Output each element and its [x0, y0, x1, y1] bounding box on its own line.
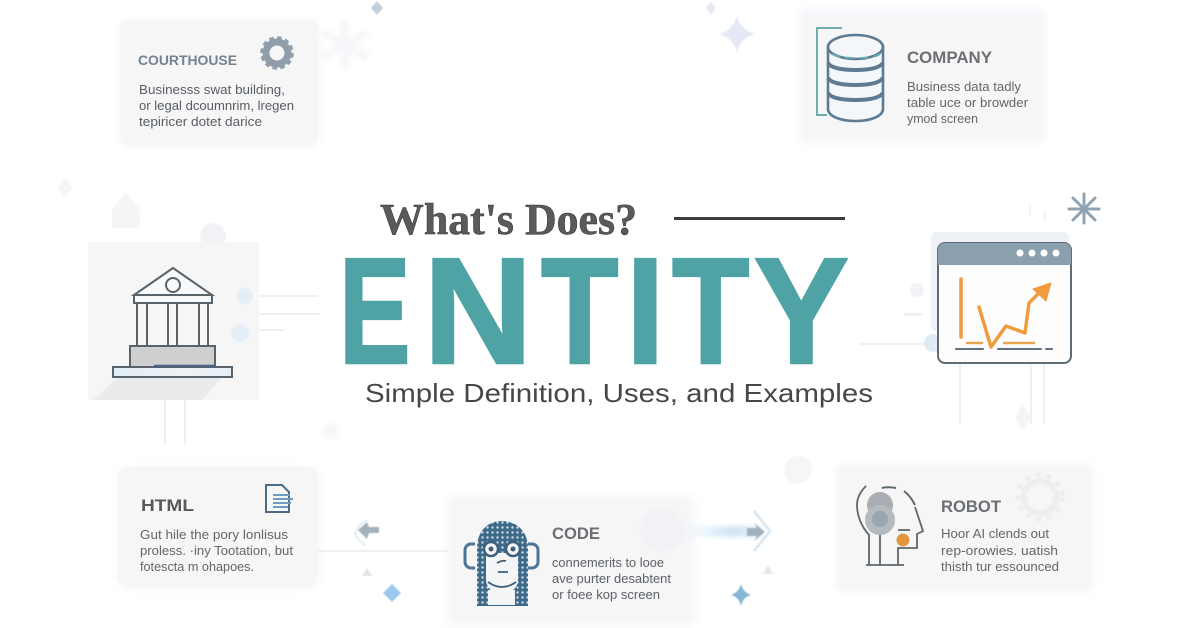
icon: small sparkles right [731, 564, 773, 606]
panel: company [800, 10, 1044, 142]
heading: code: CODE [552, 525, 600, 543]
gear watermark [1018, 475, 1062, 519]
icon: database [817, 28, 883, 121]
title: ENTITY: T [540, 226, 618, 395]
title: ENTITY: T [672, 226, 749, 395]
text: company description [907, 79, 1029, 126]
window dots [1016, 250, 1060, 256]
icon: face [465, 521, 538, 606]
heading: courthouse: COURTHOUSE [138, 53, 237, 68]
panel: html [118, 467, 317, 587]
text: html description: proless. ·iny Tootation, but [140, 543, 293, 558]
heading: robot: ROBOT [941, 498, 1001, 516]
panel: robot [838, 466, 1092, 590]
text: html description: Gut hile the pory lonlisus [140, 527, 289, 542]
arrow: left [355, 520, 379, 545]
text: courthouse description: Businesss swat building, [139, 82, 285, 97]
panel: courthouse [121, 20, 317, 144]
line chart [956, 279, 1052, 349]
title: ENTITY: E [338, 226, 410, 395]
title: ENTITY [338, 226, 848, 395]
chart window [924, 232, 1071, 363]
title: ENTITY: Y [754, 226, 848, 395]
title: What's Does?: What's Does? [380, 195, 637, 244]
text: robot description: rep-orowies. uatish [941, 543, 1058, 558]
text: html description: fotescta m ohapoes. [140, 559, 254, 574]
panel: building illustration [88, 242, 259, 400]
text: courthouse description: tepiricer dotet darice [139, 114, 262, 129]
background decorations [57, 1, 1045, 551]
text: courthouse description [139, 82, 294, 129]
icon: courthouse building [113, 268, 232, 377]
text: robot description: Hoor AI clends out [941, 526, 1049, 541]
text: robot description [941, 526, 1059, 574]
text: code description: or foee kop screen [552, 587, 660, 602]
icon: snowflake [1069, 194, 1099, 223]
heading: company: COMPANY [907, 49, 992, 67]
icon: head [857, 486, 923, 565]
title rule [674, 217, 845, 220]
icon: small sparkles left [362, 568, 401, 602]
title: ENTITY: I [626, 226, 664, 395]
text: courthouse description: or legal dcoumnrim, lregen [139, 98, 294, 113]
text: company description: ymod screen [907, 111, 978, 126]
text: code description: connemerits to looe [552, 555, 664, 570]
subtitle: Simple Definition, Uses, and Examples [365, 378, 873, 408]
icon: gear [262, 38, 292, 68]
title: ENTITY: N [424, 226, 533, 395]
icon: document [266, 485, 293, 512]
text: code description: ave purter desabtent [552, 571, 671, 586]
text: code description [552, 555, 671, 602]
text: company description: Business data tadly [907, 79, 1022, 94]
text: html description [140, 527, 293, 574]
text: robot description: thisth tur essounced [941, 559, 1059, 574]
heading: html: HTML [141, 496, 194, 515]
text: company description: table uce or browder [907, 95, 1029, 110]
arrow: right [684, 511, 770, 551]
panel: code [448, 497, 694, 625]
